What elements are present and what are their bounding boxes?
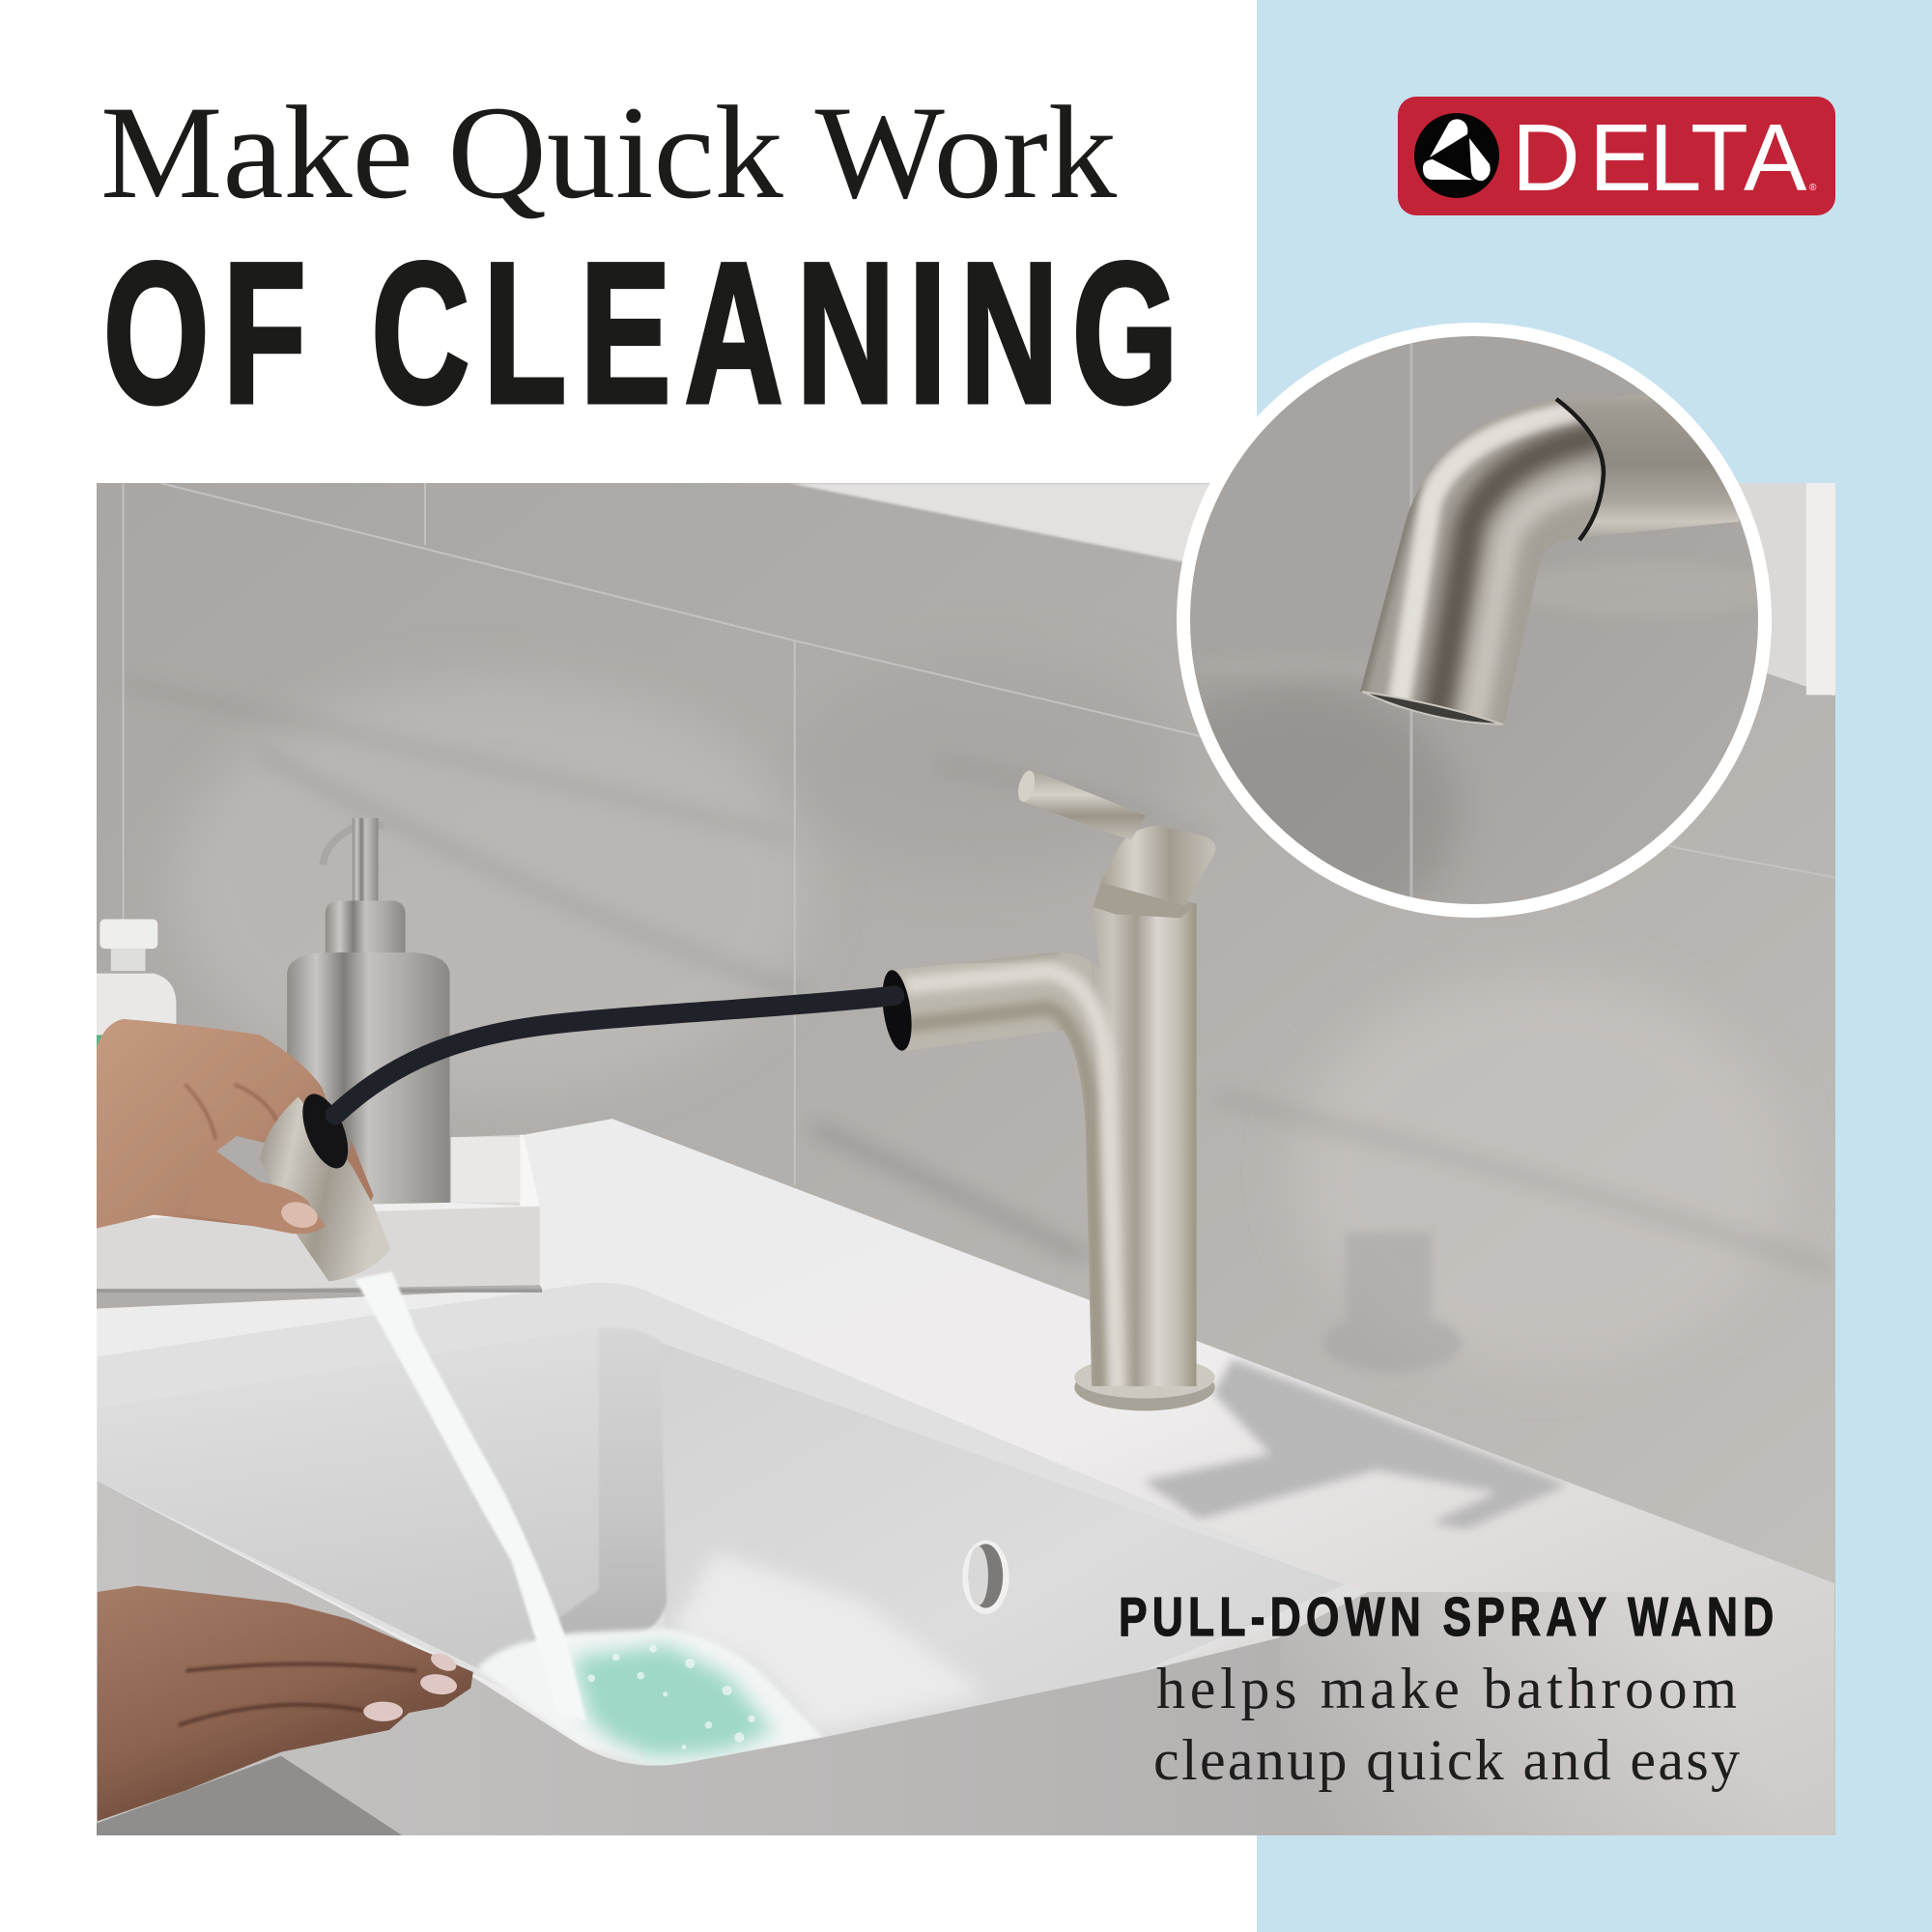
bright basin floor — [671, 1552, 985, 1731]
callout heading: PULL-DOWN SPRAY WAND — [1119, 1586, 1778, 1647]
inset white ring — [1183, 329, 1765, 911]
vanity countertop — [96, 1119, 1834, 1836]
panel: light blue backdrop — [1257, 0, 1932, 1932]
icon: Delta triangle emblem — [1414, 113, 1499, 198]
thumb nail — [278, 1198, 321, 1232]
logo: Delta badge — [1398, 97, 1835, 215]
callout line 2: cleanup quick and easy — [1153, 1728, 1740, 1792]
sink rim — [98, 1283, 1162, 1687]
logo wordmark: DELTA — [1512, 104, 1807, 211]
counter front fade under callout — [1279, 1592, 1662, 1835]
soap dispenser — [287, 818, 450, 1208]
shadowed cabinet wedge — [96, 1756, 403, 1836]
soap pump spout — [323, 826, 384, 865]
overflow hole — [962, 1540, 1009, 1614]
faucet — [878, 769, 1215, 1410]
faucet shadow on counter — [1144, 1359, 1567, 1529]
title line: Make Quick Work: Make Quick Work — [100, 78, 1117, 226]
white tray — [96, 1135, 542, 1293]
callout line 1: helps make bathroom — [1156, 1657, 1737, 1720]
basin left wall — [99, 1411, 599, 1669]
title — [100, 78, 1192, 444]
tiled wall — [96, 483, 1836, 1836]
thumb — [185, 1146, 326, 1234]
lever handle — [1015, 769, 1146, 840]
foam bubbles — [587, 1644, 755, 1749]
faucet base — [1074, 1356, 1215, 1410]
lever neck — [1093, 877, 1197, 918]
callout — [1119, 1586, 1778, 1792]
registered mark: ® — [1809, 183, 1817, 193]
spout opening — [878, 968, 916, 1053]
finger crease — [185, 1084, 277, 1140]
spout aerator opening — [1362, 692, 1503, 724]
spout rubber ring — [1556, 399, 1604, 540]
inset tile background — [1130, 323, 1777, 937]
water stream — [355, 1271, 586, 1721]
counter front — [96, 1481, 1280, 1836]
upper hand fingers — [96, 1019, 373, 1229]
soapy foam — [477, 1629, 823, 1766]
basin right wall — [661, 1343, 1345, 1687]
spout pipe — [1352, 386, 1748, 753]
lever cap — [1100, 826, 1215, 905]
finger creases — [179, 1664, 416, 1725]
lotion bottle — [96, 920, 178, 1072]
wall cabinet underside — [788, 483, 1836, 696]
basin back corner — [529, 1329, 668, 1641]
panel: bathroom photo illustration — [96, 483, 1836, 1836]
spray wand — [260, 1088, 390, 1282]
basin — [98, 1327, 1346, 1766]
faucet reflection on wall — [1323, 1233, 1462, 1373]
fingernails — [363, 1650, 459, 1721]
finger behind wand — [345, 1140, 373, 1205]
braided hose — [335, 996, 895, 1115]
faucet stem and arm — [887, 899, 1202, 1392]
inset circle: spout close-up — [1130, 323, 1777, 937]
lower hand — [98, 1586, 473, 1821]
title line: OF CLEANING: OF CLEANING — [103, 221, 1192, 444]
